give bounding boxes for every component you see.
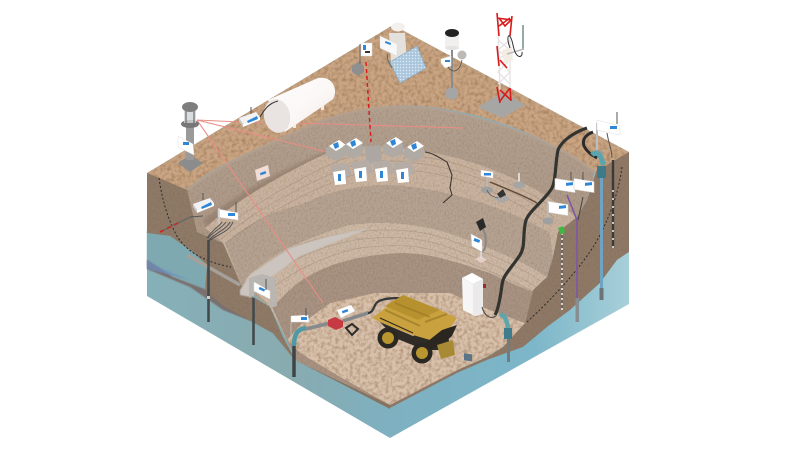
laser beams [197,120,463,303]
teal wellhead right [500,315,512,362]
ramp / grey road [240,228,370,297]
pink wall device [255,165,270,181]
sensor chain right [612,160,614,248]
red dashed sensor line left [160,217,190,232]
black tripod device [346,324,358,335]
dashed underground line left [159,178,231,267]
transmitters right bench [542,172,594,224]
plateau surface [147,25,629,190]
tank transmitter [239,101,278,127]
dark strata band on left face [147,260,297,363]
dark zone at base of wall 1 [205,152,335,224]
secondary dark hose [583,132,597,158]
ground crack brown [490,182,537,203]
solar panel [390,46,426,83]
horseshoe transmitter and probe [254,279,270,345]
left well cables and probe [207,222,233,322]
pit wall 1 [187,107,595,405]
solar panel hut [380,22,407,68]
white control cabinet [462,273,496,361]
fuel tank [261,78,335,135]
right face: brown earth cut [390,152,629,408]
pit wall 2 [225,185,553,405]
red pump [328,305,368,330]
bench 2 floor [245,223,547,405]
station with black solar panel [471,218,487,263]
dashed underground line right [527,167,622,322]
pit wall 3 [272,253,533,405]
device cluster [326,137,424,185]
bench 1 floor [205,146,577,405]
communications tower [478,13,525,118]
pit floor [287,293,525,405]
mine block base: aquifer water [147,25,629,438]
grey bar on left face [187,255,240,285]
transmitter with grey block [352,43,372,76]
front earth strip under floor (left) [287,340,390,409]
main dark hose [495,128,587,315]
pit floor pipeline left wellhead [291,308,330,377]
strata lines [215,153,560,292]
ground crack [425,152,452,203]
right well transmitter and pipe [592,112,620,300]
rim highlight band [187,107,595,190]
mid bench transmitters [481,170,525,203]
concrete horseshoe support [249,274,277,308]
rain gauge mast [441,29,466,100]
purple sensor cable [567,195,583,322]
left wall transmitters [190,193,238,225]
red dashed line [366,62,371,142]
left face: brown earth cut [147,173,297,363]
station: left weather sensor [178,102,203,172]
haul truck [372,295,457,364]
green sensor and chain [558,226,565,310]
aquifer upper wedge on left face [147,230,263,307]
pump inlet hose [368,298,402,313]
